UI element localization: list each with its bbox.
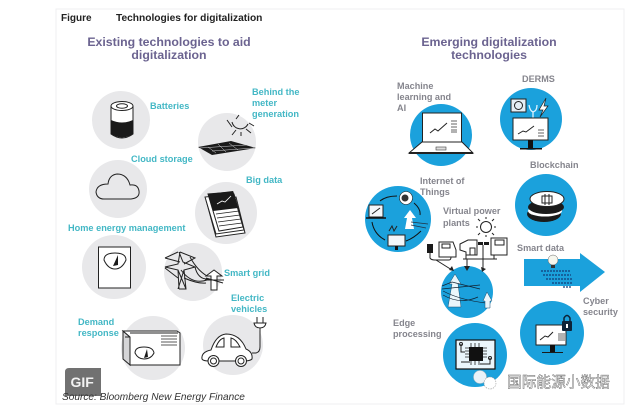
item: behind the meter generation: Behind the <box>252 87 299 97</box>
watermark: 国际能源小数据 <box>507 374 610 391</box>
item: big data <box>195 175 283 244</box>
item: behind the meter generation: generation <box>252 109 299 119</box>
item: blockchain <box>515 160 579 236</box>
heading: emerging technologies: Emerging digitalization <box>421 35 557 49</box>
item: DERMS <box>500 74 562 150</box>
item: batteries: Batteries <box>150 101 189 111</box>
item: machine learning and AI: AI <box>397 103 406 113</box>
heading: existing technologies: digitalization <box>131 48 207 62</box>
item: cloud storage: Cloud storage <box>131 154 193 164</box>
watermark <box>474 370 610 391</box>
item: cloud storage <box>89 154 193 218</box>
item: machine learning and AI: learning and <box>397 92 451 102</box>
GIF badge: GIF <box>70 374 94 390</box>
item: edge processing <box>393 318 507 387</box>
heading: existing technologies <box>87 35 251 62</box>
item: batteries <box>92 91 189 149</box>
item: blockchain: Blockchain <box>530 160 579 170</box>
item: machine learning and AI: Machine <box>397 81 433 91</box>
item: smart grid: Smart grid <box>224 268 270 278</box>
heading: existing technologies: Existing technologies to aid <box>87 35 251 49</box>
figure title: Figure <box>61 13 92 24</box>
item: home energy management <box>68 223 185 299</box>
item: internet of things: Internet of <box>420 176 465 186</box>
item: edge processing: Edge <box>393 318 415 328</box>
item: internet of things: Things <box>420 187 450 197</box>
item: DERMS: DERMS <box>522 74 555 84</box>
heading: emerging technologies <box>421 35 557 62</box>
item: behind the meter generation: meter <box>252 98 277 108</box>
item: big data: Big data <box>246 175 283 185</box>
item: electric vehicles: vehicles <box>231 304 267 314</box>
item: smart grid <box>164 243 270 301</box>
heading: emerging technologies: technologies <box>451 48 527 62</box>
item: cyber security <box>520 296 619 365</box>
item: internet of things <box>365 176 465 252</box>
item: demand response: Demand <box>78 317 114 327</box>
source note: Source: Bloomberg New Energy Finance <box>62 392 245 403</box>
item: demand response: response <box>78 328 119 338</box>
GIF badge <box>65 368 101 396</box>
item: behind the meter generation <box>198 87 299 171</box>
item: home energy management: Home energy management <box>68 223 185 233</box>
item: smart data arrow: Smart data <box>517 243 565 253</box>
item: demand response <box>78 316 185 380</box>
item: cyber security: Cyber <box>583 296 609 306</box>
item: electric vehicles: Electric <box>231 293 264 303</box>
item: cyber security: security <box>583 307 619 317</box>
item: smart data arrow <box>517 243 605 292</box>
figure title: Technologies for digitalization <box>116 13 262 24</box>
item: virtual power plants: plants <box>443 218 470 228</box>
item: electric vehicles <box>202 293 267 375</box>
item: virtual power plants: Virtual power <box>443 206 501 216</box>
item: machine learning and AI <box>397 81 473 166</box>
item: edge processing: processing <box>393 329 442 339</box>
item: virtual power plants <box>427 206 507 318</box>
